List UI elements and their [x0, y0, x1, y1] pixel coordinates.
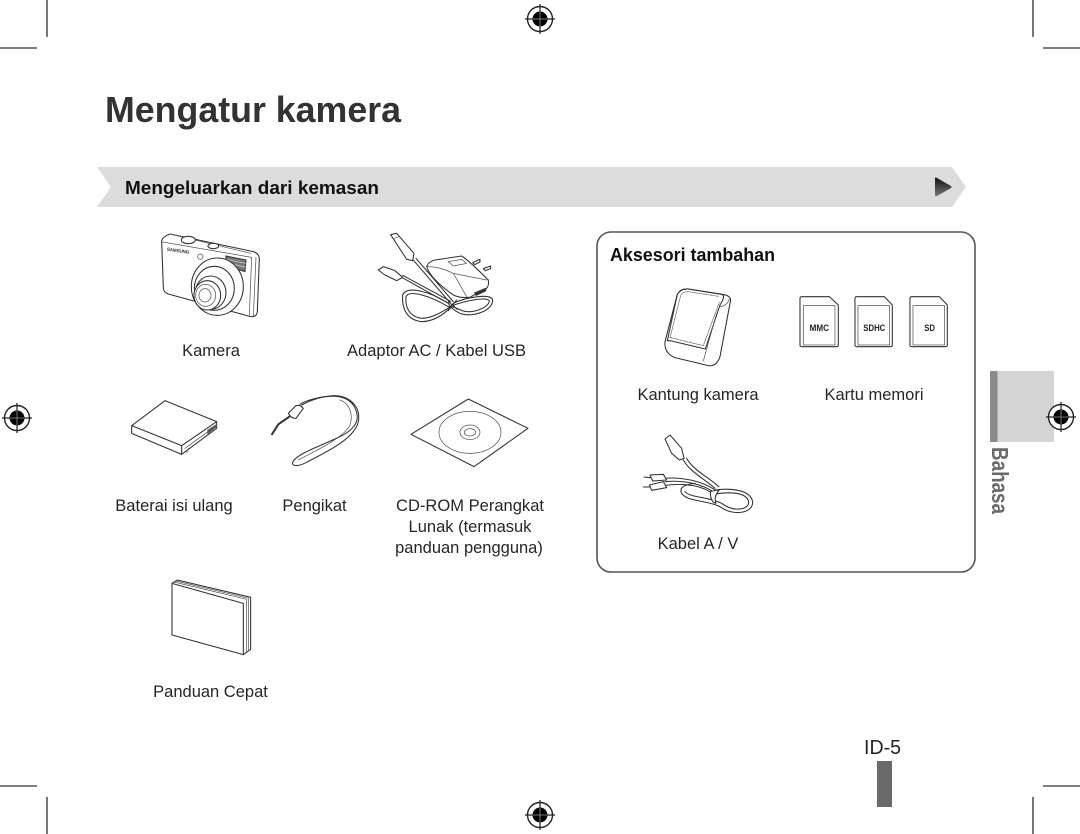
label: CD-ROM Perangkat Lunak (termasuk panduan pengguna): panduan pengguna) [395, 539, 543, 557]
label: Baterai isi ulang: Baterai isi ulang [115, 497, 233, 515]
banner heading: Mengeluarkan dari kemasan [125, 177, 379, 198]
label: CD-ROM Perangkat Lunak (termasuk panduan pengguna): CD-ROM Perangkat [396, 497, 544, 515]
icon: battery [132, 401, 217, 454]
side tab label: Bahasa [987, 447, 1012, 514]
label: Pengikat: Pengikat [282, 497, 347, 515]
label: Kabel A / V: Kabel A / V [658, 535, 738, 553]
side tab: Bahasa [987, 371, 1054, 514]
panel heading: Aksesori tambahan [610, 245, 775, 265]
label: Adaptor AC / Kabel USB: Adaptor AC / Kabel USB [347, 342, 526, 360]
icon: camera: SAMSUNG [167, 247, 190, 255]
banner arrow [935, 178, 952, 196]
icon: memory cards [800, 297, 947, 347]
label: Kamera: Kamera [182, 342, 241, 360]
panel: Aksesori tambahan [597, 232, 975, 572]
label: Panduan Cepat: Panduan Cepat [153, 683, 268, 701]
icon: camera case [665, 289, 731, 366]
icon: quick guide booklet [172, 580, 251, 655]
icon: wrist strap [272, 396, 359, 466]
registration mark: top [525, 4, 555, 34]
label: CD-ROM Perangkat Lunak (termasuk panduan pengguna) [395, 497, 544, 557]
label: CD-ROM Perangkat Lunak (termasuk panduan pengguna): Lunak (termasuk [409, 518, 532, 536]
registration mark: right [1046, 402, 1076, 432]
label: Kartu memori: Kartu memori [824, 386, 924, 404]
registration mark: left [2, 403, 32, 433]
title: Mengatur kamera [105, 89, 402, 130]
section banner: Mengeluarkan dari kemasan [97, 167, 966, 207]
icon: CD-ROM [411, 399, 528, 467]
page number tab [877, 761, 892, 807]
registration mark: bottom [525, 800, 555, 830]
icon: AC adaptor and USB cable [378, 233, 493, 322]
icon: memory cards: MMC [810, 323, 829, 333]
label: Kantung kamera: Kantung kamera [637, 386, 759, 404]
page number: ID-5 [864, 737, 901, 759]
icon: memory cards: SD [924, 323, 935, 333]
icon: camera [162, 234, 259, 317]
icon: A/V cable [643, 435, 753, 513]
icon: memory cards: SDHC [863, 323, 886, 333]
